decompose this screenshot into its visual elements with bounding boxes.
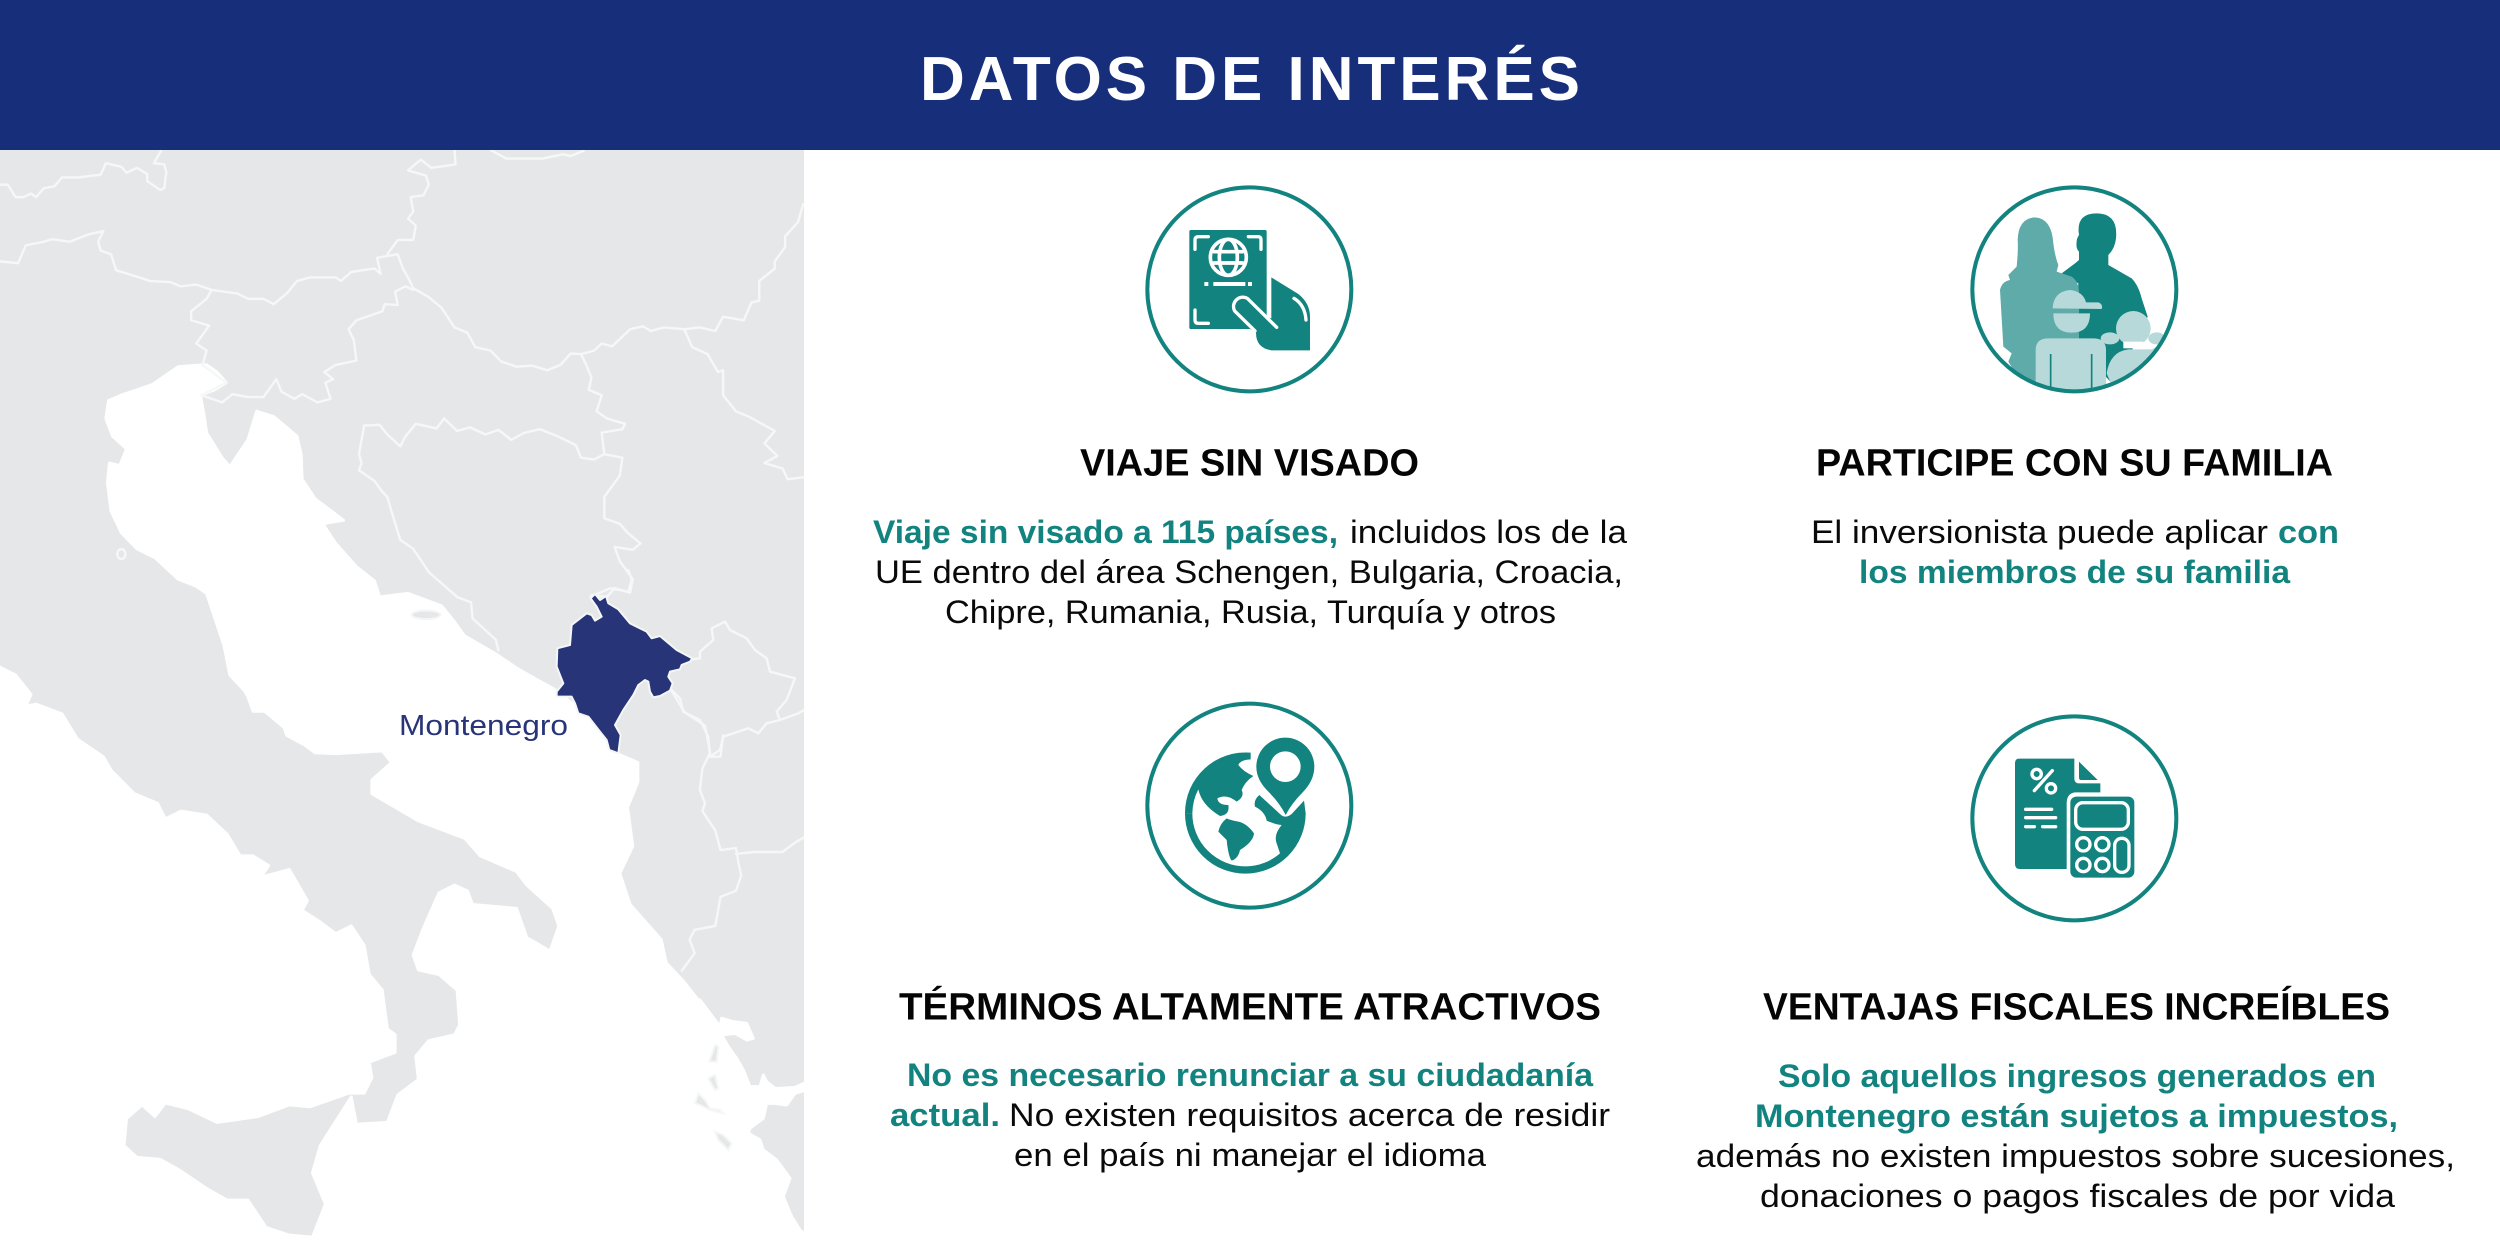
text block: con [2278, 514, 2339, 550]
icon: globe with location pin [1147, 704, 1351, 908]
central Mediterranean sea and southern borders [0, 636, 806, 1250]
text block: No existen requisitos acerca de residir [1009, 1097, 1610, 1133]
panel: ventajas fiscales increibles [1696, 716, 2455, 1214]
panel: participe con su familia [1811, 187, 2339, 590]
title: DATOS DE INTERÉS [920, 45, 1580, 114]
text block: El inversionista puede aplicar [1811, 514, 2268, 550]
panel: terminos altamente atractivos [890, 704, 1610, 1173]
heading: VIAJE SIN VISADO [1080, 442, 1419, 484]
heading: PARTICIPE CON SU FAMILIA [1816, 442, 2333, 484]
Montenegro shape [557, 594, 692, 753]
map label: Montenegro: Montenegro [399, 710, 568, 742]
text block [890, 1057, 1610, 1173]
text block: Viaje sin visado a 115 países, [873, 514, 1338, 550]
text block: Montenegro están sujetos a impuestos, [1755, 1098, 2398, 1134]
text block: incluidos los de la [1350, 514, 1627, 550]
text block: los miembros de su familia [1859, 554, 2290, 590]
Greek coast and Ionian islands [678, 998, 804, 1237]
icon: tax document and calculator [1972, 716, 2176, 920]
text block: UE dentro del área Schengen, Bulgaria, Croacia, [875, 554, 1623, 590]
text block: Chipre, Rumania, Rusia, Turquía y otros [945, 594, 1556, 630]
heading: TÉRMINOS ALTAMENTE ATRACTIVOS [899, 984, 1601, 1028]
header banner [0, 0, 2500, 150]
text block: Solo aquellos ingresos generados en [1778, 1058, 2376, 1094]
text block: No es necesario renunciar a su ciudadanía [907, 1057, 1593, 1093]
north Adriatic sea and borders [0, 150, 803, 711]
text block: en el país ni manejar el idioma [1014, 1137, 1486, 1173]
text block: actual. [890, 1097, 1000, 1133]
text block: donaciones o pagos fiscales de por vida [1760, 1178, 2395, 1214]
heading: VENTAJAS FISCALES INCREÍBLES [1763, 984, 2390, 1028]
panel: map of the Adriatic region [0, 150, 806, 1250]
icon: family silhouettes [1972, 187, 2176, 397]
panel: viaje sin visado [873, 187, 1627, 630]
text block: además no existen impuestos sobre sucesiones, [1696, 1138, 2455, 1174]
text block [1696, 1058, 2455, 1214]
text block [1811, 514, 2339, 590]
icon: passport and hand [1147, 187, 1351, 391]
Balkan borders around Kosovo [557, 570, 804, 757]
text block [873, 514, 1627, 630]
